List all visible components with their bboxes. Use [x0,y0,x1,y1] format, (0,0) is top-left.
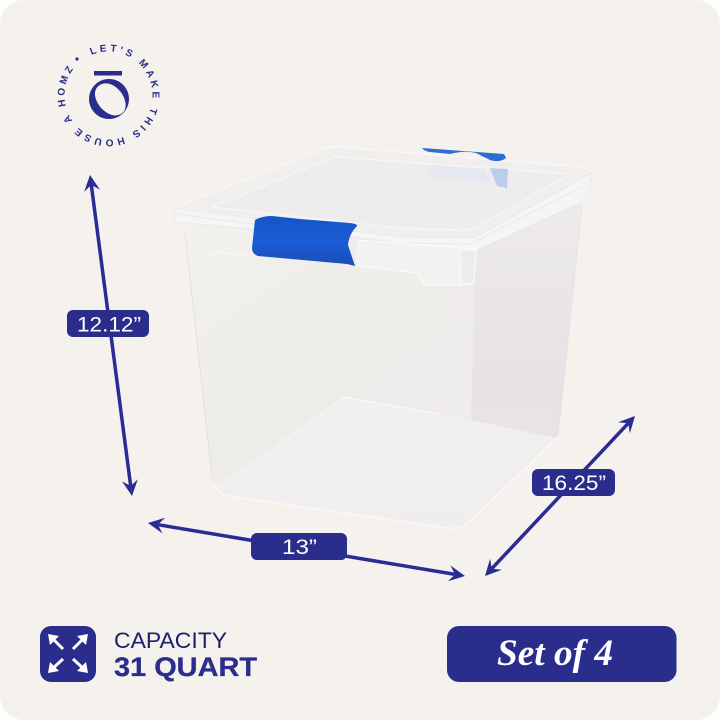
lid front rim [174,173,592,250]
set of 4 badge: Set of 4 [497,633,613,674]
dimension: width 13 inches [148,518,465,581]
capacity block [40,626,258,682]
depth label [532,469,615,496]
blue latch front [252,216,357,266]
logo mark [89,71,129,119]
box right edge [558,205,582,436]
right lid tab [582,178,590,205]
dimension: width 13 inches: 13” [282,536,317,559]
logo dot [75,57,79,61]
dimension: depth 16.25 inches [485,416,635,576]
lid top [174,147,592,238]
set of 4 badge [447,626,676,682]
logo circular slogan: LET'S MAKE THIS HOUSE A HOMZ [58,44,160,146]
front clip tab [358,240,476,285]
box front face [184,222,476,528]
box left edge [185,232,212,478]
box inner edges [214,397,558,528]
left clip tab [187,252,250,256]
height label [67,310,149,337]
lid inner recess [212,157,570,230]
capacity heading: CAPACITY [114,628,227,653]
clip reflection [428,165,490,182]
storage box [174,147,592,528]
logo badge [58,44,160,146]
dimension: depth 16.25 inches: 16.25” [542,472,606,495]
capacity value: 31 QUART [114,652,258,682]
width label [251,533,347,560]
dimension: height 12.12 inches: 12.12” [77,314,141,336]
box floor [214,397,556,528]
icon: expand arrows [40,626,96,682]
height arrow [84,175,138,496]
blue latch back [422,148,506,161]
dimension: height 12.12 inches [67,175,149,496]
rim highlight [176,184,588,244]
box right side face [467,200,582,523]
blue latch reflection [490,168,508,188]
clip ribs [460,250,476,284]
box corner seam [458,285,460,524]
depth arrow [485,416,635,576]
width arrow [148,518,465,581]
